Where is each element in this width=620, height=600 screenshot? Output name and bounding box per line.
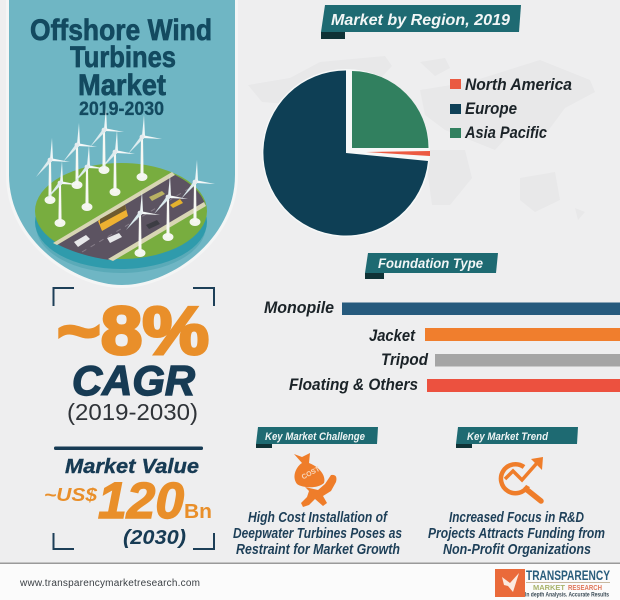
bar chart: foundation type: Jacket <box>369 327 416 345</box>
text block: challenge: High Cost Installation of <box>248 510 389 526</box>
market value number: 120 <box>98 472 184 529</box>
heading: Foundation Type: Foundation Type <box>378 256 483 271</box>
illustration: wind turbines island <box>35 108 215 273</box>
bar chart: foundation type: Floating & Others <box>289 376 418 394</box>
logo: RESEARCH <box>568 583 602 592</box>
website: www.transparencymarketresearch.com <box>19 578 200 589</box>
year: (2030) <box>123 527 186 549</box>
icon: cost money bag carrier <box>294 453 336 507</box>
logo: MARKET <box>533 583 565 592</box>
CAGR label: CAGR <box>72 357 196 404</box>
heading: Key Market Trend <box>456 427 578 448</box>
text block: trend <box>428 510 605 558</box>
bar chart: foundation type: Tripod <box>381 351 429 369</box>
cars <box>74 191 183 247</box>
heading: Market by Region: Market by Region, 2019 <box>331 12 510 29</box>
text block: trend: Non-Profit Organizations <box>443 542 591 558</box>
heading: Key Market Trend: Key Market Trend <box>467 431 548 443</box>
title: Offshore Wind <box>30 14 212 47</box>
legend: regions: Europe <box>465 100 517 118</box>
text block: challenge: Restraint for Market Growth <box>236 542 400 558</box>
title <box>30 14 212 120</box>
bus <box>98 205 128 231</box>
text block: challenge: Deepwater Turbines Poses as <box>233 526 402 542</box>
corner brackets <box>54 288 214 549</box>
pie chart: market by region <box>262 69 430 237</box>
legend: regions: Asia Pacific <box>464 124 547 142</box>
bar chart: foundation type: Monopile <box>264 299 334 317</box>
market value label: Market Value <box>65 456 199 478</box>
footer <box>0 562 620 600</box>
turbines <box>36 108 215 257</box>
icon: magnifier with rising chart <box>501 457 543 501</box>
title: Turbines <box>70 41 176 74</box>
bar chart: foundation type <box>264 299 620 394</box>
heading: Key Market Challenge: Key Market Challenge <box>265 431 365 443</box>
market value number: Bn <box>184 501 212 523</box>
panel: CAGR and market value <box>44 288 214 549</box>
text block: challenge <box>233 510 402 558</box>
heading: Market by Region <box>321 5 521 39</box>
title: 2019-2030 <box>79 99 164 120</box>
title: Market <box>78 69 166 102</box>
heading: Foundation Type <box>365 253 498 279</box>
CAGR value: ~8% <box>57 293 209 369</box>
period: (2019-2030) <box>67 399 198 425</box>
panel: title shield <box>6 0 238 288</box>
legend: regions <box>450 76 572 142</box>
heading: Key Market Challenge <box>256 427 378 448</box>
market value number: ~US$ <box>44 485 98 505</box>
legend: regions: North America <box>465 76 572 94</box>
icon: cost money bag carrier: COST <box>301 466 322 481</box>
world map background <box>248 56 595 220</box>
market value number <box>44 472 212 529</box>
text block: trend: Increased Focus in R&D <box>449 510 584 526</box>
logo <box>495 567 610 598</box>
